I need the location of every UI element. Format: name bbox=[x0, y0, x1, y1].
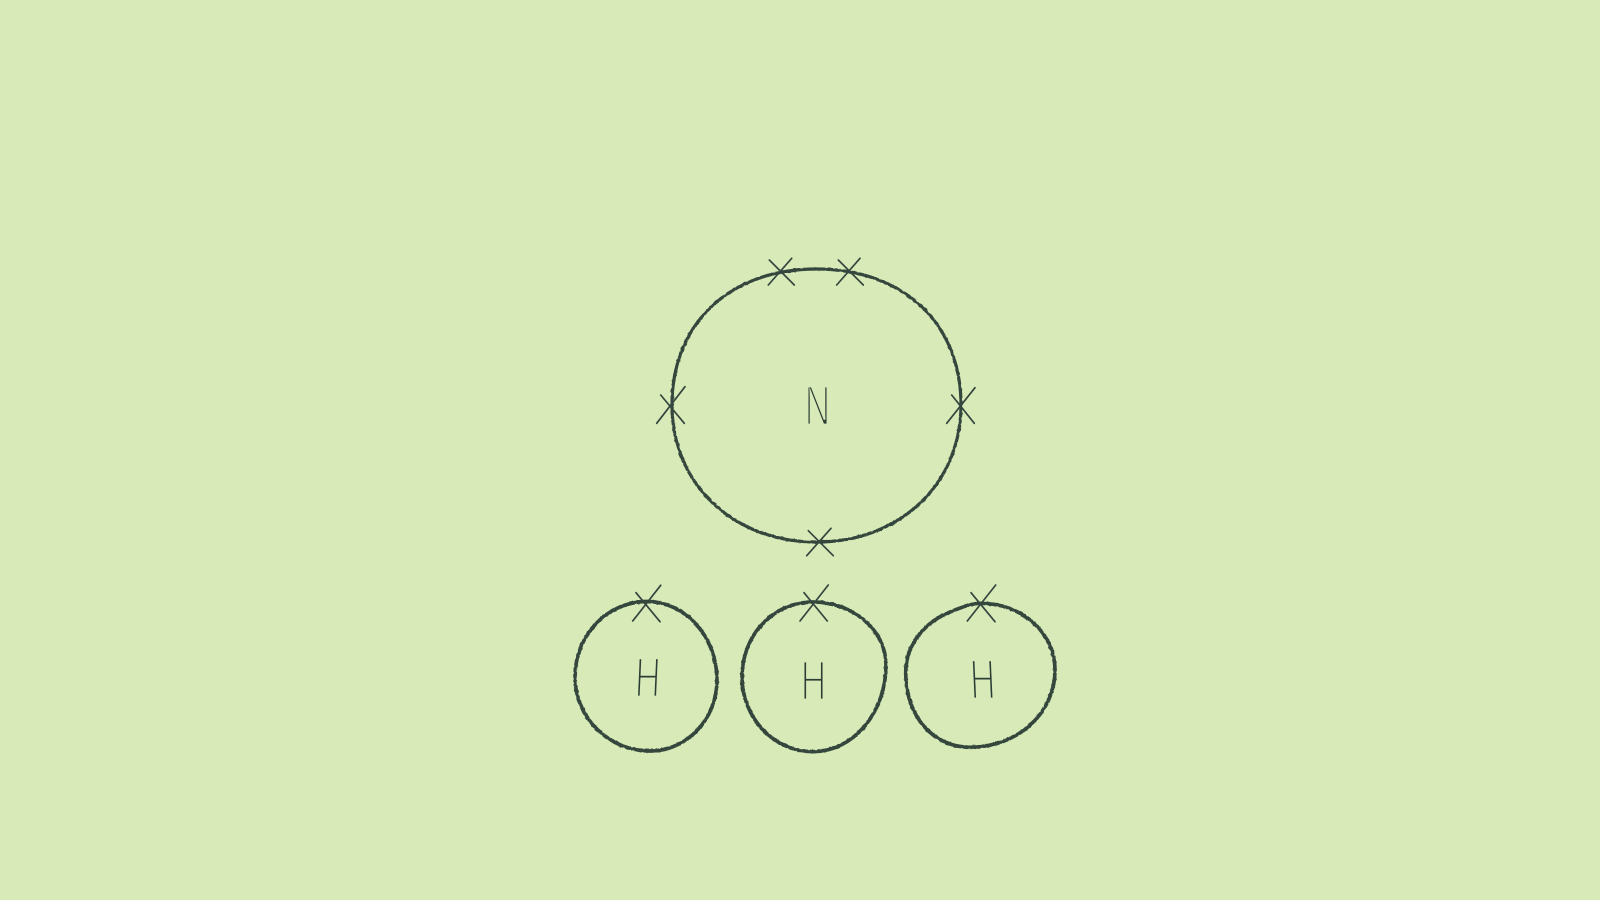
label: H: H bbox=[634, 647, 662, 710]
hydrogen atom 3 bbox=[906, 585, 1055, 747]
hydrogen 2 shell ring bbox=[742, 602, 886, 752]
label: N: N bbox=[805, 375, 830, 438]
electron cross: hydrogen 3 bbox=[967, 585, 996, 622]
hydrogen atom 2 bbox=[742, 585, 886, 752]
electron cross: bottom bbox=[807, 528, 833, 556]
hydrogen 3 shell ring bbox=[906, 603, 1055, 747]
nitrogen shell ring bbox=[672, 269, 961, 542]
hydrogen atom 1 bbox=[575, 585, 717, 751]
electron cross: left bbox=[657, 387, 685, 423]
label: H: H bbox=[801, 650, 826, 713]
electron cross: hydrogen 1 bbox=[633, 585, 661, 622]
electron cross: top right bbox=[837, 258, 863, 285]
hydrogen 1 shell ring bbox=[575, 602, 717, 751]
electron cross: hydrogen 2 bbox=[800, 585, 828, 621]
nitrogen atom bbox=[657, 258, 975, 556]
electron cross: top left bbox=[768, 258, 794, 285]
electron cross: right bbox=[947, 388, 975, 423]
label: H: H bbox=[969, 649, 997, 712]
